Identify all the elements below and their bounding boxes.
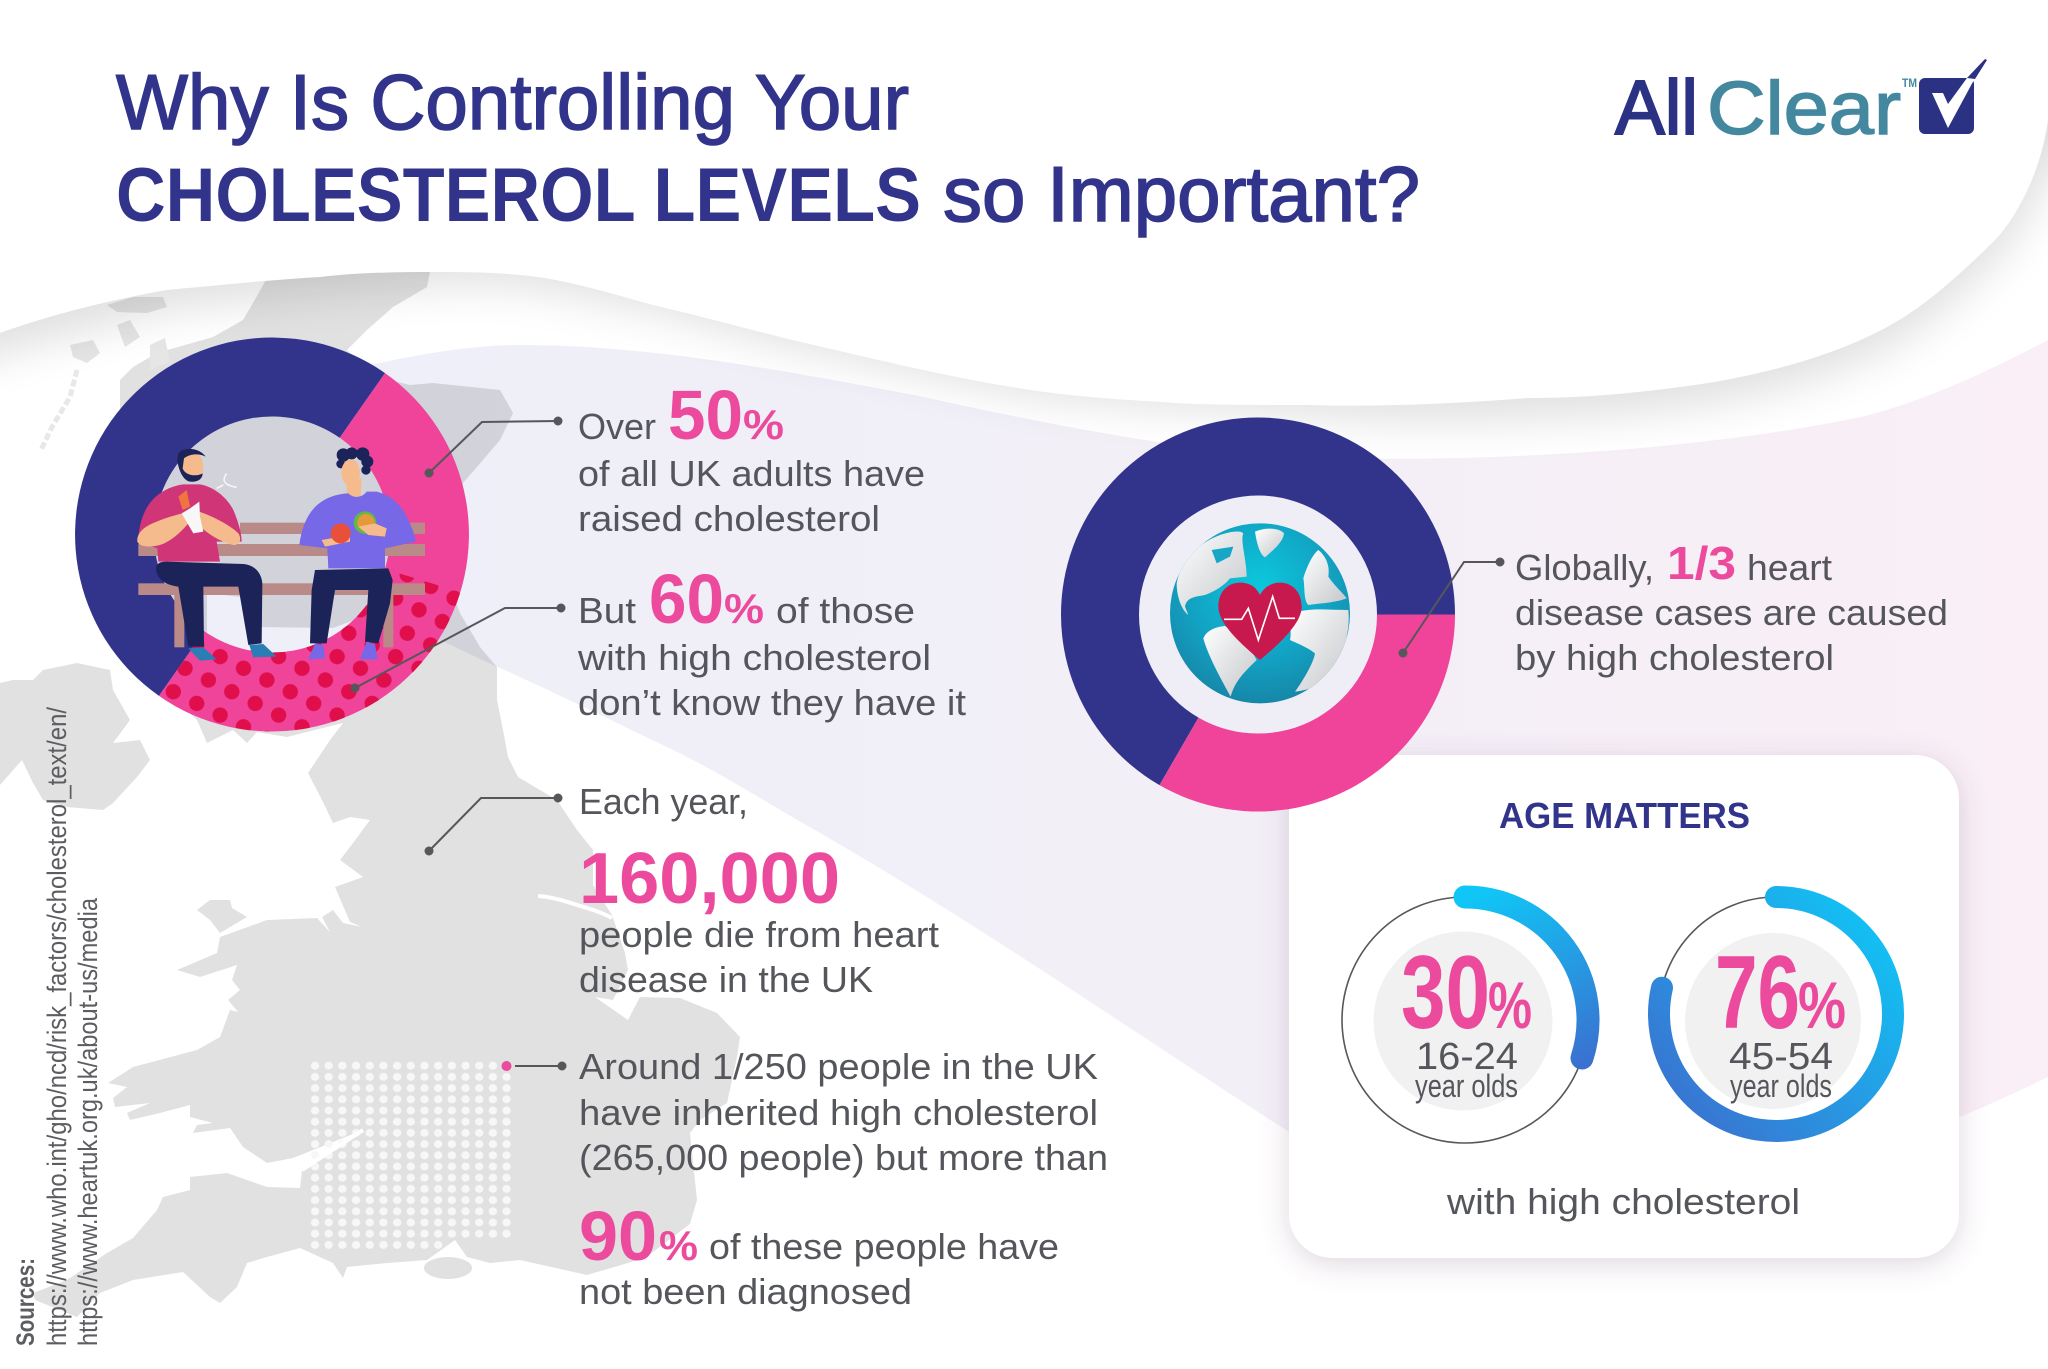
stat: but 60%: % (724, 585, 764, 632)
title: CHOLESTEROL LEVELS (116, 153, 921, 238)
sources: Sources: (12, 1258, 40, 1346)
stat: but 60%: don’t know they have it (578, 682, 966, 723)
stat: over 50%: % (743, 401, 784, 448)
stat: globally 1/3: heart (1747, 547, 1832, 588)
stat: but 60%: with high cholesterol (577, 637, 931, 678)
stat: around 1/250, 90%: % (659, 1222, 698, 1269)
illustration: two men on a bench (137, 447, 425, 661)
gauge: 76% of 45-54 year olds (1659, 897, 1893, 1131)
stat: over 50% (578, 376, 925, 539)
stat: around 1/250, 90%: Around 1/250 people in the UK (579, 1046, 1098, 1087)
icon: globe with heart (1170, 523, 1350, 703)
leader line: globally (1400, 558, 1504, 656)
stat: but 60%: of those (776, 590, 915, 631)
donut chart: UK adults with raised cholesterol (75, 338, 469, 732)
map: UK and Ireland (0, 262, 740, 1317)
panel: age matters (1289, 755, 1959, 1258)
stat: each year 160,000: Each year, (579, 781, 748, 822)
stat: each year 160,000 (579, 781, 939, 1000)
logo: AllClear: All (1615, 65, 1698, 151)
stat: around 1/250, 90%: not been diagnosed (579, 1271, 912, 1312)
stat: globally 1/3: Globally, (1515, 547, 1654, 588)
gauge: 30% of 16-24 year olds (1342, 897, 1588, 1143)
stat: but 60% (577, 560, 966, 723)
gauge: 76% of 45-54 year olds: 45-54 (1729, 1036, 1833, 1078)
stat: around 1/250, 90%: have inherited high cholesterol (579, 1092, 1098, 1133)
caption: with high cholesterol: with high cholesterol (1446, 1181, 1800, 1222)
stat: around 1/250, 90%: (265,000 people) but more than (579, 1137, 1108, 1178)
stat: around 1/250, 90% (579, 1046, 1108, 1312)
leader line: 50% (426, 418, 562, 476)
stat: globally 1/3: by high cholesterol (1515, 637, 1834, 678)
gauge: 76% of 45-54 year olds: 76 (1715, 935, 1800, 1051)
gauge: 30% of 16-24 year olds: 16-24 (1416, 1036, 1518, 1078)
stat: over 50%: raised cholesterol (578, 498, 880, 539)
stat: but 60%: But (578, 590, 636, 631)
background band: lavender to pink (125, 340, 2048, 1190)
leader line: each year (426, 794, 562, 854)
sources: https://www.heartuk.org.uk/about-us/media (73, 897, 103, 1346)
title: Why Is Controlling Your (116, 58, 909, 146)
heading: age matters: AGE MATTERS (1499, 795, 1750, 836)
stat: globally 1/3: disease cases are caused (1515, 592, 1948, 633)
stat: each year 160,000: disease in the UK (579, 959, 873, 1000)
gauge: 30% of 16-24 year olds: year olds (1415, 1068, 1518, 1104)
stat: around 1/250, 90%: 90 (579, 1197, 657, 1275)
stat: over 50%: Over (578, 406, 656, 447)
gauge: 30% of 16-24 year olds: 30 (1401, 935, 1490, 1051)
stat: over 50%: of all UK adults have (578, 453, 925, 494)
gauge: 76% of 45-54 year olds: year olds (1730, 1068, 1832, 1104)
sources (12, 707, 103, 1346)
logo: AllClear: TM (1902, 76, 1917, 90)
stat: over 50%: 50 (668, 376, 743, 454)
header shadow (0, 0, 2048, 421)
title (116, 58, 1420, 238)
donut chart: global heart disease (1061, 417, 1455, 811)
gauge: 76% of 45-54 year olds: % (1798, 968, 1846, 1042)
stat: each year 160,000: people die from heart (579, 914, 939, 955)
stat: each year 160,000: 160,000 (579, 839, 840, 919)
logo: AllClear: Clear (1707, 66, 1901, 150)
header white wave (0, 0, 2048, 406)
leader line: 1 in 250 (515, 1062, 566, 1070)
stat: globally 1/3 (1515, 537, 1948, 678)
gauge: 30% of 16-24 year olds: % (1488, 968, 1532, 1042)
leader line: 60% (352, 604, 564, 692)
stat: but 60%: 60 (649, 560, 724, 638)
dot grid: 1 in 250 (302, 1060, 513, 1250)
stat: around 1/250, 90%: of these people have (709, 1226, 1059, 1267)
stat: globally 1/3: 1/3 (1667, 537, 1736, 589)
logo: AllClear (1615, 59, 1987, 151)
sources: https://www.who.int/gho/ncd/risk_factors/cholesterol_text/en/ (42, 707, 72, 1346)
title: so Important? (943, 150, 1420, 238)
